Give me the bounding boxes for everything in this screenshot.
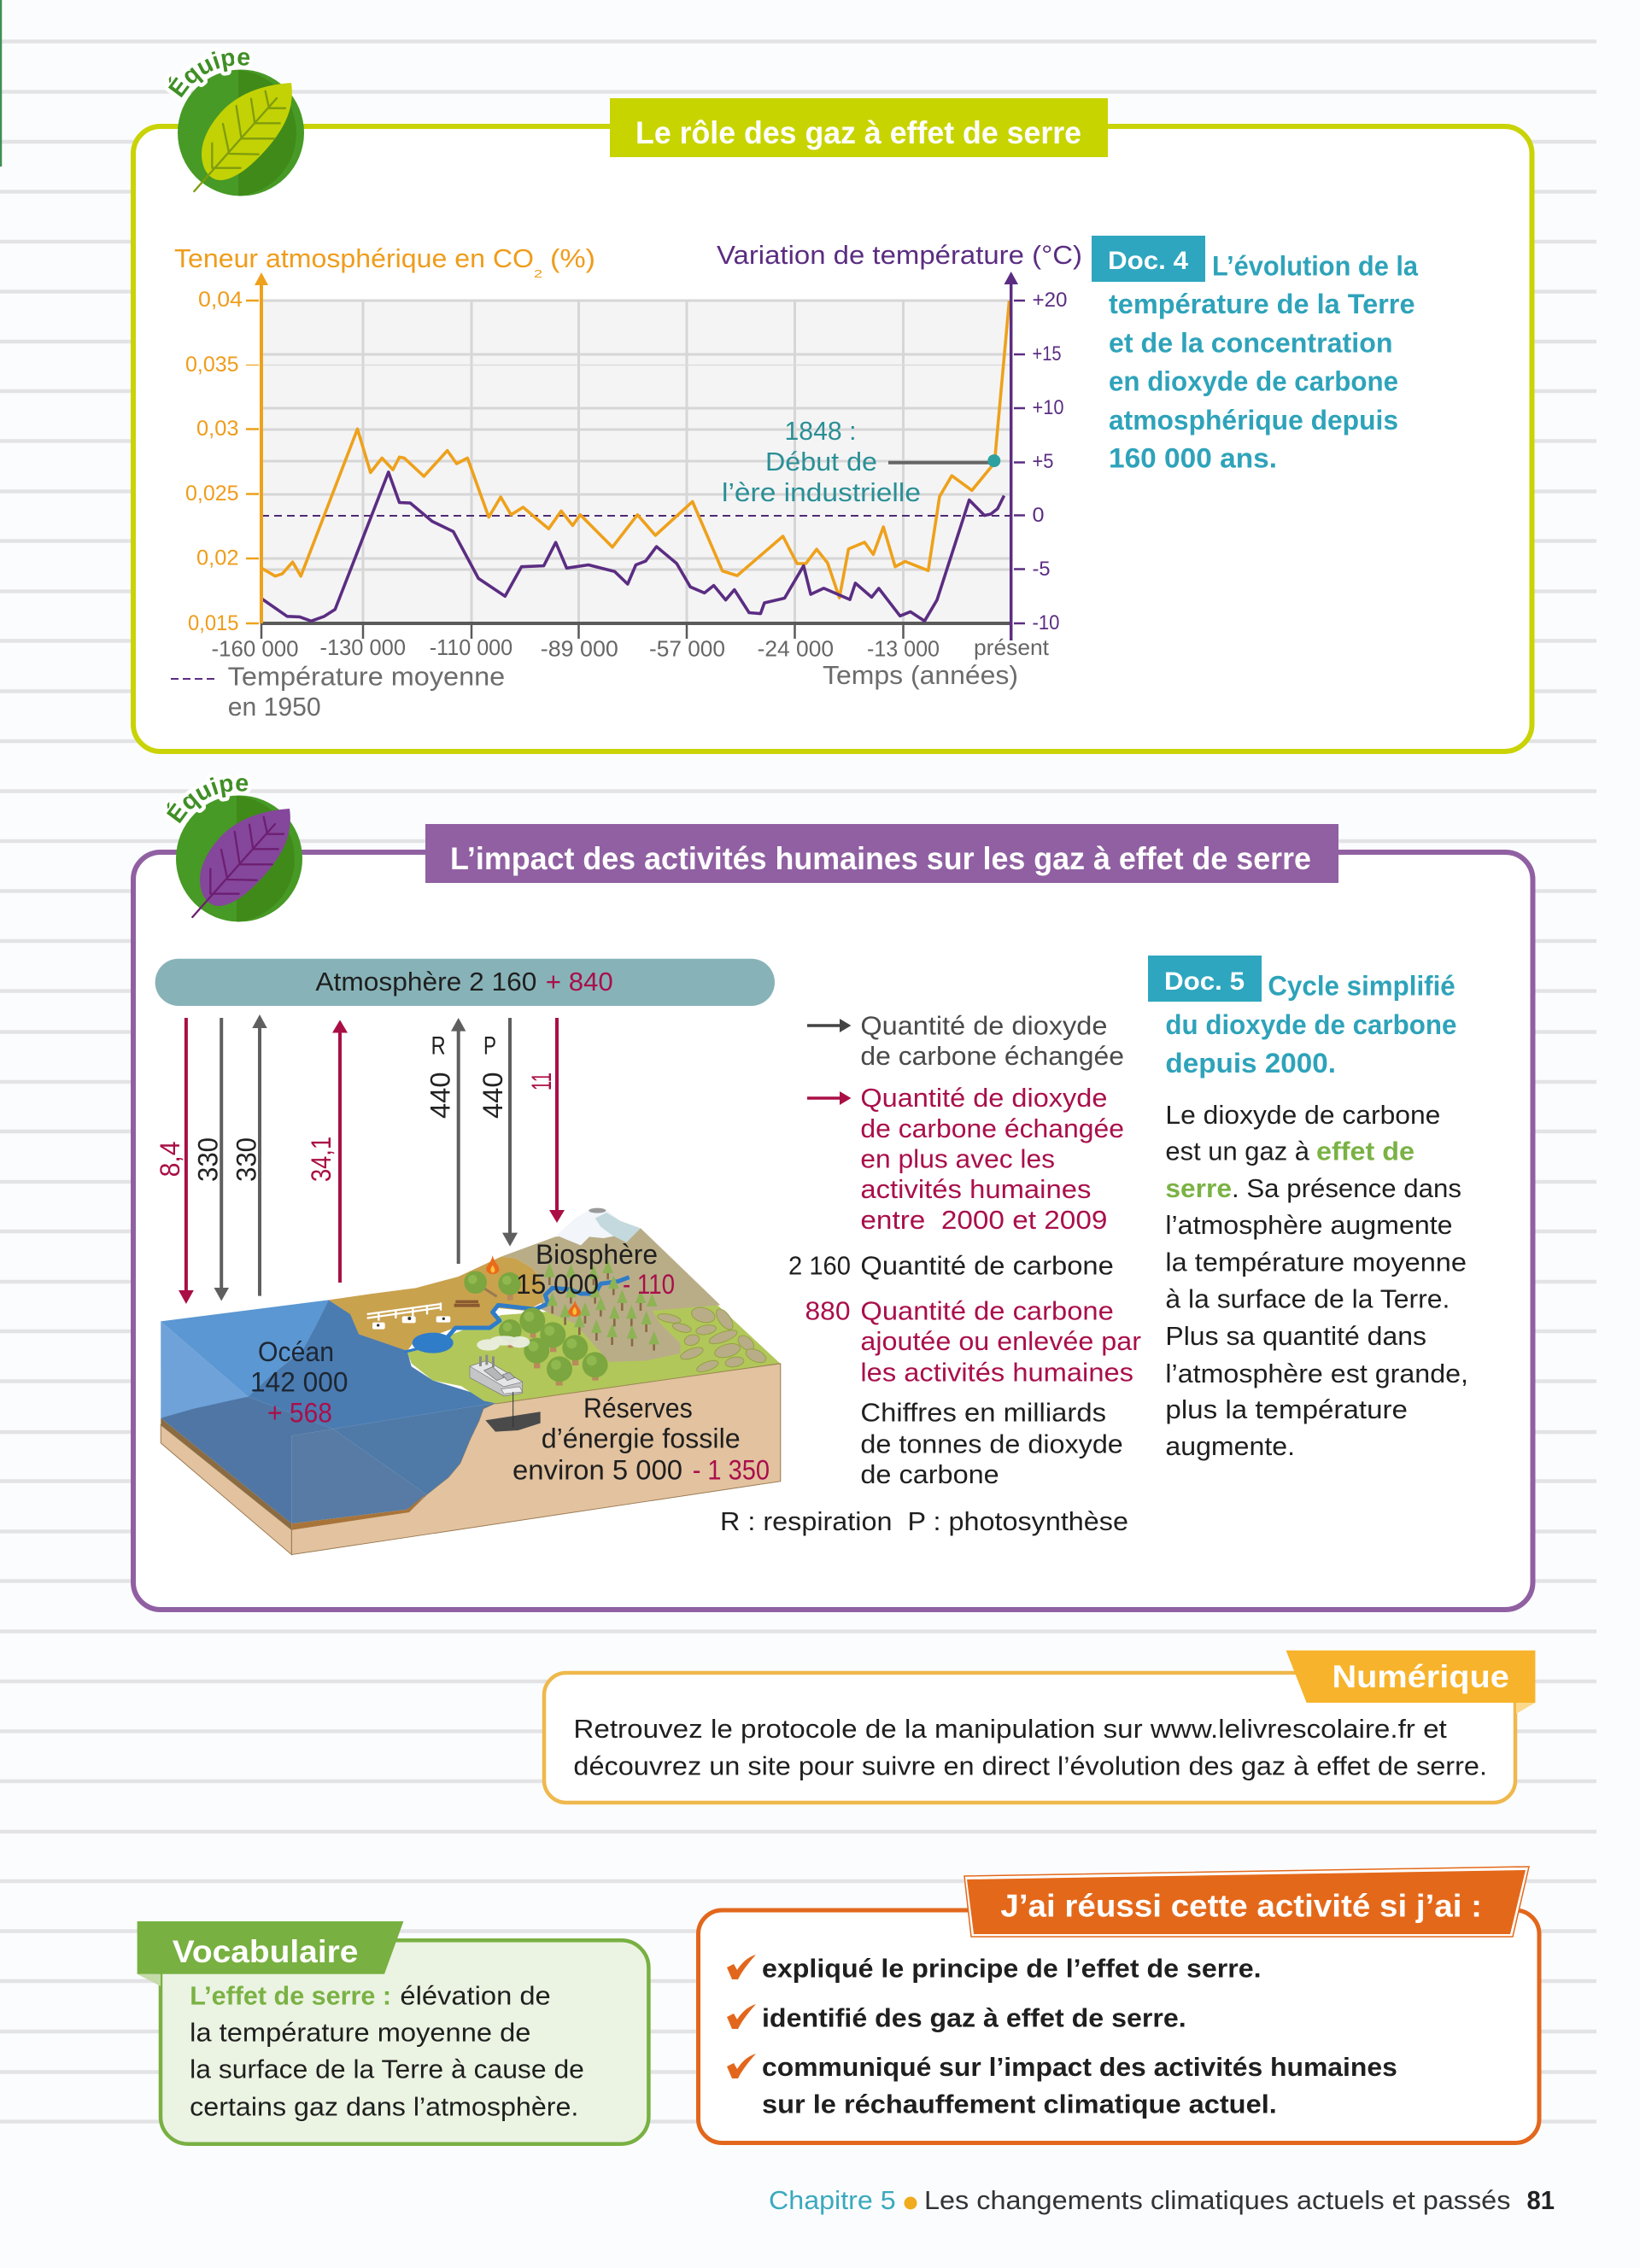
time tick labels: présent xyxy=(974,634,1050,660)
time tick labels: -89 000 xyxy=(541,635,618,661)
label: Biosphère: - 110 xyxy=(623,1269,675,1300)
panel: Numérique xyxy=(544,1651,1535,1803)
time tick labels: -110 000 xyxy=(430,634,512,660)
text: definition: élévation de xyxy=(400,1980,551,2010)
CO2 tick labels xyxy=(185,288,243,635)
text block: Doc. 5: augmente. xyxy=(1165,1431,1295,1461)
curve: temperature xyxy=(261,472,1004,621)
text block: Doc. 4: en dioxyde de carbone xyxy=(1109,365,1398,396)
annotation: 1848 industrial era: 1848 : xyxy=(784,417,856,446)
heading: Le rôle des gaz à effet de serre xyxy=(610,98,1108,157)
text block: Doc. 5: Doc. 5 xyxy=(1164,967,1245,996)
legend: diagram xyxy=(720,1011,1141,1536)
legend: diagram: R : respiration P : photosynthèse xyxy=(720,1506,1128,1536)
arrow labels: R xyxy=(431,1032,446,1061)
text block: Doc. 5: Plus sa quantité dans xyxy=(1165,1321,1426,1351)
label: Océan: Océan xyxy=(258,1336,334,1367)
time tick labels xyxy=(212,634,1050,661)
legend: mean temperature 1950: en 1950 xyxy=(228,692,321,722)
text block: Doc. 4: Doc. 4 xyxy=(1108,247,1188,275)
block base and ocean xyxy=(161,1300,781,1555)
CO2 tick labels: 0,025 xyxy=(185,482,239,506)
text: definition: la surface de la Terre à cause de xyxy=(190,2054,584,2084)
text block: Doc. 5: Le dioxyde de carbone xyxy=(1165,1100,1440,1130)
legend: diagram: les activités humaines xyxy=(860,1358,1133,1387)
time tick labels: -13 000 xyxy=(867,635,940,661)
legend: diagram: Quantité de carbone xyxy=(860,1295,1114,1325)
arrow labels: 8,4 xyxy=(155,1141,185,1177)
text block: Doc. 4: 160 000 ans. xyxy=(1109,442,1277,473)
legend: diagram: en plus avec les xyxy=(860,1144,1055,1174)
tag: Numérique xyxy=(1286,1651,1535,1714)
CO2 tick labels: 0,04 xyxy=(198,288,243,312)
arrow labels: 440 xyxy=(477,1073,508,1119)
text block: Doc. 5: la température moyenne xyxy=(1165,1247,1467,1277)
legend: diagram: Quantité de carbone xyxy=(860,1251,1114,1281)
bar: Atmosphère: Atmosphère 2 160 xyxy=(315,967,536,997)
CO2 tick labels: 0,015 xyxy=(188,611,239,635)
label: Réserves: d’énergie fossile xyxy=(542,1423,741,1454)
text block: Doc. 5 xyxy=(1148,956,1468,1461)
icon: team leaf green xyxy=(166,51,304,196)
text block: Doc. 4: atmosphérique depuis xyxy=(1109,405,1398,435)
label: Biosphère xyxy=(516,1239,675,1300)
icon: team leaf purple xyxy=(167,777,302,922)
axis title: CO2 xyxy=(174,243,595,280)
text block: Doc. 4: et de la concentration xyxy=(1109,328,1392,359)
axis title: CO2: 2 xyxy=(534,267,542,280)
legend: diagram: de carbone xyxy=(860,1459,999,1489)
legend: diagram: 880 xyxy=(805,1295,851,1325)
time tick labels: -130 000 xyxy=(319,634,406,660)
legend: diagram: de tonnes de dioxyde xyxy=(860,1429,1123,1458)
arrows: fluxes xyxy=(179,1014,565,1304)
text block: Doc. 5: est un gaz à xyxy=(1165,1136,1310,1166)
axis title: temperature: Variation de température (°C) xyxy=(717,240,1082,270)
text block: Doc. 5: du dioxyde de carbone xyxy=(1165,1009,1456,1040)
tag: Vocabulaire: Vocabulaire xyxy=(173,1934,358,1969)
CO2 tick labels: 0,02 xyxy=(196,547,239,570)
text block: Doc. 5: l’atmosphère augmente xyxy=(1165,1210,1453,1240)
CO2 tick labels: 0,035 xyxy=(185,353,239,377)
legend: diagram: entre 2000 et 2009 xyxy=(860,1205,1107,1235)
label: Océan: + 568 xyxy=(267,1397,332,1428)
arrow labels: 11 xyxy=(526,1073,557,1090)
axis: temperature xyxy=(1004,272,1025,640)
text block: Doc. 4: température de la Terre xyxy=(1109,289,1414,319)
tag: J'ai réussi xyxy=(964,1867,1529,1937)
text: definition xyxy=(190,1980,584,2121)
icon label: Équipe: Équipe xyxy=(167,777,251,823)
legend arrow: gray xyxy=(807,1019,851,1032)
text block: Doc. 5: à la surface de la Terre. xyxy=(1165,1284,1450,1314)
bar: Atmosphère xyxy=(155,959,775,1006)
text block: Doc. 5: serre xyxy=(1165,1173,1232,1203)
text block: Doc. 5: . Sa présence dans xyxy=(1232,1173,1461,1203)
text block: Doc. 5: depuis 2000. xyxy=(1165,1048,1336,1078)
legend: diagram: ajoutée ou enlevée par xyxy=(860,1326,1141,1356)
legend: diagram: Quantité de dioxyde xyxy=(860,1011,1107,1041)
CO2 tick labels: 0,03 xyxy=(196,417,239,441)
legend: diagram: 2 160 xyxy=(788,1251,851,1281)
heading: Le rôle des gaz à effet de serre: Le rôle des gaz à effet de serre xyxy=(636,115,1081,150)
temperature tick labels: +10 xyxy=(1032,396,1064,419)
legend: mean temperature 1950: Température moyenne xyxy=(228,661,505,692)
arrow labels: 34,1 xyxy=(306,1137,337,1182)
label: Réserves xyxy=(512,1393,770,1485)
axis title: CO2: (%) xyxy=(550,243,595,273)
text: definition: la température moyenne de xyxy=(190,2018,530,2048)
footer: chapter and page: 81 xyxy=(1527,2185,1555,2215)
text: protocole: Retrouvez le protocole de la manipulation sur www.lelivrescolaire.fr et xyxy=(573,1714,1447,1744)
checklist xyxy=(727,1954,1397,2119)
temperature tick labels: -10 xyxy=(1032,611,1059,634)
time tick labels: -160 000 xyxy=(212,635,299,661)
legend arrow: red xyxy=(807,1091,851,1105)
legend: diagram: de carbone échangée xyxy=(860,1114,1124,1143)
legend: diagram: activités humaines xyxy=(860,1174,1091,1204)
heading: L'impact xyxy=(425,824,1338,883)
icon label: Équipe: Équipe xyxy=(166,51,249,97)
footer: chapter and page: Chapitre 5 xyxy=(769,2185,896,2215)
arrow labels: 440 xyxy=(425,1073,456,1119)
arrow labels xyxy=(155,1032,557,1182)
diagram: carbon cycle block xyxy=(161,1208,781,1555)
text block: Doc. 5: l’atmosphère est grande, xyxy=(1165,1359,1468,1388)
legend: diagram: Quantité de dioxyde xyxy=(860,1083,1107,1113)
temperature tick labels: +5 xyxy=(1032,450,1054,473)
panel: J'ai réussi xyxy=(699,1867,1539,2143)
temperature tick labels: +20 xyxy=(1032,289,1068,312)
checklist: identifié des gaz à effet de serre. xyxy=(762,2003,1186,2032)
annotation: 1848 industrial era: Début de xyxy=(765,447,877,476)
line chart: CO2 and temperature xyxy=(171,240,1082,722)
text block: Doc. 5: effet de xyxy=(1316,1136,1414,1166)
legend: diagram: de carbone échangée xyxy=(860,1041,1124,1071)
axis: CO2 xyxy=(246,272,268,623)
annotation: 1848 industrial era xyxy=(722,417,1000,507)
label: Biosphère: 15 000 xyxy=(516,1269,599,1300)
checklist: sur le réchauffement climatique actuel. xyxy=(762,2090,1277,2119)
label: Réserves: environ 5 000 xyxy=(512,1454,682,1485)
tag: Numérique: Numérique xyxy=(1332,1659,1509,1694)
annotation: 1848 industrial era: l’ère industrielle xyxy=(722,478,921,507)
land and biosphere xyxy=(329,1208,780,1432)
axis title: CO2: Teneur atmosphérique en CO xyxy=(174,243,534,273)
temperature tick labels: +15 xyxy=(1032,342,1061,365)
panel: Vocabulaire xyxy=(138,1921,648,2144)
arrow labels: P xyxy=(483,1032,496,1061)
label: Biosphère: Biosphère xyxy=(536,1239,658,1270)
legend: diagram: Chiffres en milliards xyxy=(860,1398,1106,1428)
legend: mean temperature 1950 xyxy=(171,661,505,722)
arrow labels: 330 xyxy=(231,1137,261,1182)
arrow labels: 330 xyxy=(193,1137,224,1182)
text: protocole xyxy=(573,1714,1487,1780)
text block: Doc. 5: Cycle simplifié xyxy=(1268,971,1456,1002)
bar: Atmosphère: + 840 xyxy=(546,967,613,997)
text: definition: L’effet de serre : xyxy=(190,1980,391,2010)
temperature tick labels: 0 xyxy=(1032,504,1044,527)
label: Réserves: Réserves xyxy=(583,1393,693,1423)
text block: Doc. 5: plus la température xyxy=(1165,1394,1408,1424)
label: Océan xyxy=(250,1336,348,1428)
time tick labels: -24 000 xyxy=(758,635,834,661)
label: Réserves: - 1 350 xyxy=(693,1454,770,1485)
heading: L'impact: L’impact des activités humaines sur les gaz à effet de serre xyxy=(450,841,1311,876)
temperature tick labels: -5 xyxy=(1032,558,1051,581)
checklist: expliqué le principe de l’effet de serre. xyxy=(762,1954,1262,1984)
time tick labels: -57 000 xyxy=(649,635,725,661)
text: definition: certains gaz dans l’atmosphère. xyxy=(190,2091,578,2121)
label: Océan: 142 000 xyxy=(250,1366,348,1397)
text block: Doc. 4 xyxy=(1092,236,1418,473)
text block: Doc. 4: L’évolution de la xyxy=(1212,251,1418,282)
checklist: communiqué sur l’impact des activités humaines xyxy=(762,2052,1397,2082)
curve: CO2 xyxy=(261,301,1010,598)
footer: chapter and page: Les changements climatiques actuels et passés xyxy=(924,2185,1510,2215)
text: protocole: découvrez un site pour suivre en direct l’évolution des gaz à effet de serre. xyxy=(573,1751,1487,1780)
tag: J'ai réussi: J’ai réussi cette activité si j’ai : xyxy=(1000,1889,1482,1924)
x axis title: Temps (années) xyxy=(823,660,1018,690)
panel: impact des activités humaines xyxy=(131,777,1536,1612)
temperature tick labels xyxy=(1032,289,1068,634)
tag: Vocabulaire xyxy=(138,1921,403,1986)
panel: rôle des gaz à effet de serre xyxy=(131,51,1534,754)
